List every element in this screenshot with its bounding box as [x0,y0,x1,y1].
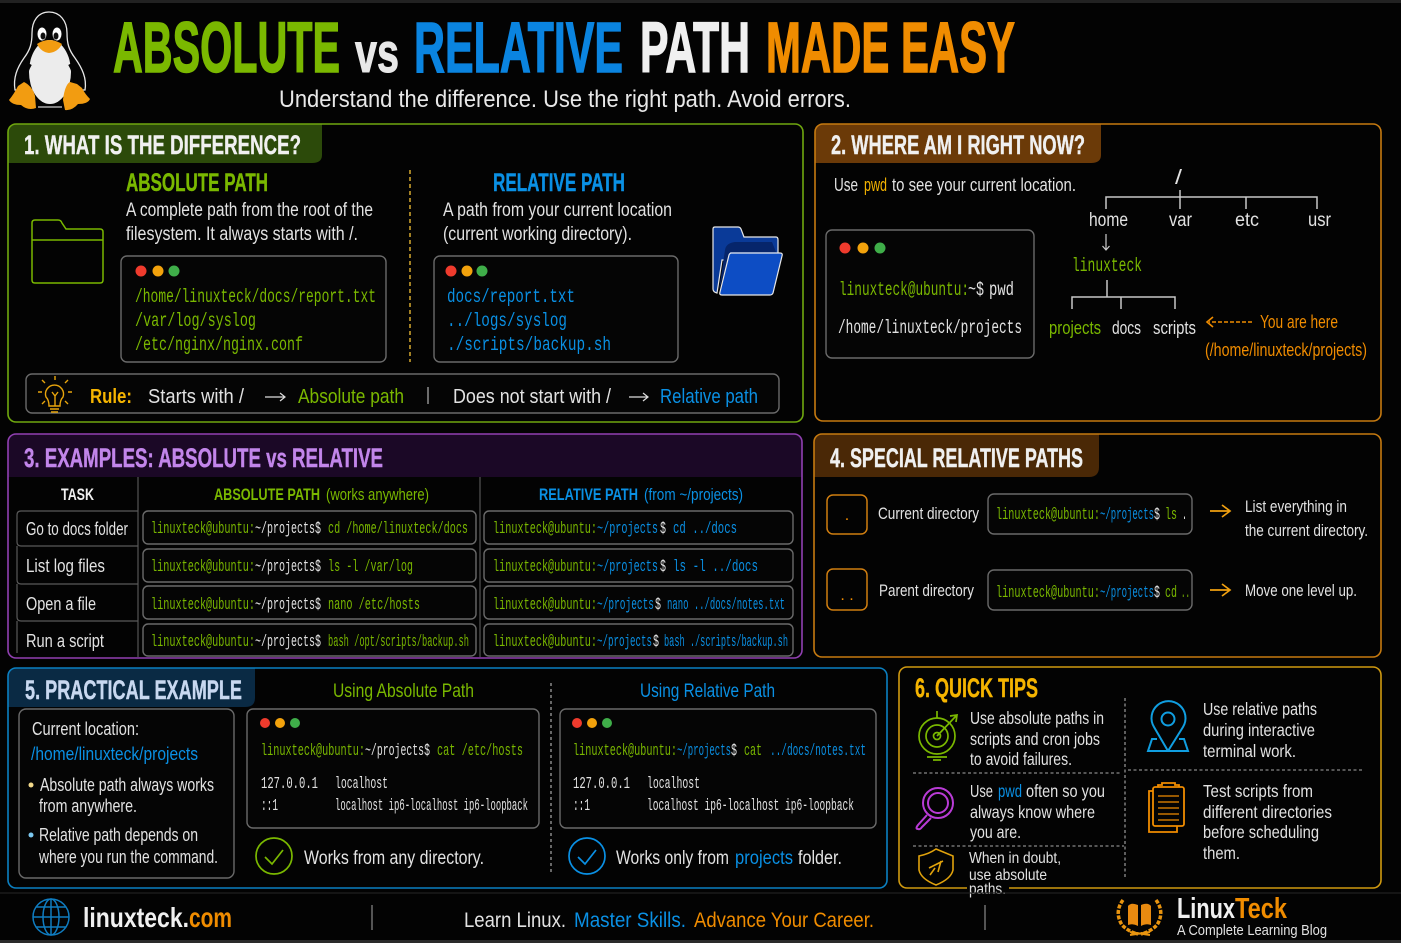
relative commands column: $ [660,557,666,576]
terminal: pwd: /home/linuxteck/projects [838,317,1022,339]
relative commands column: bash ./scripts/backup.sh [664,632,788,651]
directory tree: etc [1235,210,1259,231]
relative commands column: nano ../docs/notes.txt [667,595,785,614]
title: MADE EASY [766,9,1015,88]
directory tree: scripts [1153,318,1196,338]
terminal: absolute cat: 127.0.0.1 [261,774,318,793]
relative commands column: ~/projects [597,595,654,614]
terminal: relative cat: ::1 [573,796,590,815]
absolute commands column: ~/projects$ [255,595,321,614]
icon: shield [919,849,953,885]
terminal: pwd: ~$ [968,279,984,301]
row: parent directory: $ [1154,583,1160,602]
current location box: from anywhere. [39,796,137,816]
relative commands column: linuxteck@ubuntu: [493,519,597,538]
absolute path description: filesystem. It always starts with /. [126,224,358,245]
rule bar [26,374,779,413]
footer [0,893,1401,939]
check: works only from projects folder [569,838,842,874]
terminal: absolute cat: localhost ip6-localhost ip6-loopback [335,796,528,815]
tip: use pwd often: you are. [970,822,1021,842]
directory tree [1049,167,1332,338]
absolute commands column: cd /home/linuxteck/docs [328,519,468,538]
terminal: pwd: pwd [989,279,1014,301]
relative commands column: $ [655,595,661,614]
rule bar: Starts with / [148,386,244,408]
column headers: (works anywhere) [326,485,429,504]
panel: 2. where am I right now [815,124,1381,421]
panel: 5. practical example [8,668,887,888]
row: parent directory: cd [1165,583,1177,602]
relative commands column: linuxteck@ubuntu: [493,632,597,651]
terminal: relative examples [434,256,678,362]
row: current directory: List everything in [1245,497,1347,516]
tip: test scripts: them. [1203,843,1240,863]
row: parent directory: linuxteck@ubuntu: [996,583,1100,602]
tip: absolute paths in scripts [919,708,1104,769]
row: parent directory: .. [1181,583,1190,602]
current location box [19,709,234,878]
relative path description [443,200,672,245]
directory tree: projects [1049,318,1101,338]
tip: test scripts [1149,781,1332,863]
relative path description: (current working directory). [443,224,632,245]
row: current directory: ls [1165,505,1177,524]
tip: absolute paths in scripts: Use absolute paths in [970,708,1104,728]
panel 1 heading: 1. WHAT IS THE DIFFERENCE? [24,130,301,160]
icon: globe [33,899,69,935]
absolute commands column: linuxteck@ubuntu: [151,519,255,538]
terminal: relative examples: docs/report.txt [447,286,575,308]
brand name [1177,893,1327,939]
heading: using relative path: Using Relative Path [640,681,775,702]
icon: target [919,711,957,760]
current location box: Relative path depends on [39,825,198,845]
relative commands column: ~/projects [597,557,658,576]
tip: use pwd often: always know where [970,802,1095,822]
absolute commands column: nano /etc/hosts [328,595,420,614]
title: vs [355,21,399,84]
row: current directory: $ [1154,505,1160,524]
pwd sentence: to see your current location. [892,175,1076,195]
title: ABSOLUTE [113,9,340,88]
terminal: absolute examples: /etc/nginx/nginx.conf [135,334,303,356]
row: current directory: linuxteck@ubuntu: [996,505,1100,524]
terminal: relative cat: localhost [647,774,700,793]
relative commands column: linuxteck@ubuntu: [493,557,597,576]
panel: 6. quick tips [899,667,1381,898]
tagline: Learn Linux. [464,909,566,932]
arrow: does not start with [629,393,648,401]
tip: test scripts: Test scripts from [1203,781,1313,801]
tagline [464,909,874,932]
directory tree: linuxteck [1072,255,1142,277]
relative commands column: linuxteck@ubuntu: [493,595,597,614]
absolute path heading: ABSOLUTE PATH [126,169,268,197]
relative commands column [484,511,793,656]
absolute commands column: bash /opt/scripts/backup.sh [328,632,469,651]
terminal: relative cat: ~/projects [677,741,731,760]
brand name: A Complete Learning Blog [1177,922,1327,939]
icon: magnifier [916,788,953,829]
terminal: absolute cat: ::1 [261,796,278,815]
directory tree: docs [1112,318,1141,338]
row: current directory: . [1182,505,1187,524]
column headers: (from ~/projects) [644,485,743,504]
tip: test scripts: different directories [1203,802,1332,822]
title [113,9,1015,88]
task column: List log files [26,556,105,576]
absolute commands column: ~/projects$ [255,632,321,651]
terminal: absolute cat: ~/projects$ [365,741,430,760]
terminal: absolute cat: localhost [335,774,388,793]
column headers: RELATIVE PATH [539,485,638,504]
brand name: Teck [1235,893,1288,925]
terminal: pwd: linuxteck@ubuntu: [839,279,969,301]
current location box: where you run the command. [38,847,218,867]
terminal: absolute examples: /var/log/syslog [135,310,256,332]
row: parent directory: Parent directory [879,581,974,600]
panel 4 tab background [814,434,1099,477]
row: parent directory: . . [840,587,854,604]
pwd sentence [834,175,1076,195]
row: parent directory [827,569,1357,610]
rule bar: Absolute path [298,386,404,408]
relative commands column: $ [653,632,659,651]
relative commands column: ls -l ../docs [673,557,758,576]
terminal: absolute cat: cat /etc/hosts [437,741,523,760]
icon: outline folder [32,220,103,283]
task column [17,511,138,653]
directory tree: var [1169,210,1193,231]
tagline: Advance Your Career. [694,909,874,932]
panel 1 tab background [8,124,322,163]
terminal: absolute examples [121,256,386,362]
column headers: ABSOLUTE PATH [214,485,320,504]
arrow: starts with [265,393,285,401]
row: current directory: . [845,507,849,524]
tip: when in doubt [919,849,1061,898]
heading: using absolute path: Using Absolute Path [333,681,474,702]
panel: 3. examples [8,434,802,658]
panel: 1. what is the difference [8,124,803,422]
panel: 4. special relative paths [814,434,1381,657]
terminal: relative cat: 127.0.0.1 [573,774,630,793]
brand name: Linux [1177,893,1235,925]
subtitle: Understand the difference. Use the right path. Avoid errors. [279,86,851,113]
icon: light bulb [38,376,72,412]
absolute commands column: ~/projects$ [255,519,321,538]
website: linuxteck. [83,902,189,933]
row: current directory: Current directory [878,504,979,523]
row: parent directory: Move one level up. [1245,581,1357,600]
pwd sentence: pwd [864,175,887,195]
panel 2 tab background [815,124,1101,163]
terminal: absolute cat [247,709,539,828]
absolute commands column: ls -l /var/log [328,557,413,576]
column headers: TASK [61,485,95,504]
panel 3 header band [8,434,802,477]
icon: Linux penguin [9,12,90,110]
current location box: /home/linuxteck/projects [31,744,198,764]
tip: use relative paths: Use relative paths [1203,699,1317,719]
task column: Go to docs folder [26,519,128,539]
tip: use relative paths [1148,699,1317,761]
terminal: relative cat: localhost ip6-localhost ip6-loopback [647,796,854,815]
check: works only from projects folder: folder. [798,848,842,869]
terminal: relative cat: ../docs/notes.txt [770,741,866,760]
task column: Open a file [26,594,96,614]
tip: when in doubt: use absolute [969,867,1047,884]
tip: use relative paths: during interactive [1203,720,1315,740]
you are here callout: You are here [1260,312,1338,332]
tip: use pwd often: Use [970,781,993,801]
rule bar: Rule: [90,386,132,408]
relative commands column: ~/projects [597,519,658,538]
terminal: absolute cat: linuxteck@ubuntu: [261,741,365,760]
panel 5 heading: 5. PRACTICAL EXAMPLE [25,675,242,705]
directory tree: / [1175,167,1183,189]
row: current directory: the current directory. [1245,521,1368,540]
absolute commands column: ~/projects$ [255,557,321,576]
absolute path description [126,200,373,245]
panel 6 heading: 6. QUICK TIPS [915,673,1038,703]
absolute commands column: linuxteck@ubuntu: [151,632,255,651]
tip: use relative paths: terminal work. [1203,741,1296,761]
logo: book with laurel [1118,900,1161,935]
row: current directory [827,494,1368,540]
absolute commands column: linuxteck@ubuntu: [151,557,255,576]
terminal: relative cat: $ [731,741,737,760]
terminal: relative cat: linuxteck@ubuntu: [573,741,677,760]
tip: use pwd often [916,781,1105,842]
tip: use pwd often: often so you [1026,781,1105,801]
absolute commands column [143,511,476,656]
website: com [189,902,232,933]
tip: test scripts: before scheduling [1203,822,1319,842]
icon: blue open folder [713,227,782,295]
check: works only from projects folder: projects [735,848,793,869]
terminal: absolute examples: /home/linuxteck/docs/report.txt [135,286,376,308]
column headers [61,485,743,504]
tip: absolute paths in scripts: scripts and cron jobs [970,729,1100,749]
tip: absolute paths in scripts: to avoid failures. [970,749,1072,769]
absolute path description: A complete path from the root of the [126,200,373,221]
relative commands column: ~/projects [597,632,652,651]
tip: when in doubt: When in doubt, [969,850,1061,867]
current location box: Absolute path always works [40,775,214,795]
icon: location pin [1148,701,1188,751]
panel 2 heading: 2. WHERE AM I RIGHT NOW? [831,130,1085,160]
pwd sentence: Use [834,175,858,195]
panel 4 heading: 4. SPECIAL RELATIVE PATHS [830,443,1083,473]
terminal: pwd [826,230,1034,358]
title: PATH [640,9,750,88]
terminal: relative cat: cat [744,741,762,760]
relative commands column: $ [660,519,666,538]
relative path description: A path from your current location [443,200,672,221]
tip: when in doubt: paths. [969,881,1006,898]
check: works from any directory: Works from any directory. [304,848,484,869]
relative path heading: RELATIVE PATH [493,169,625,197]
icon: clipboard [1149,783,1184,832]
current location box: Current location: [32,719,139,739]
task column: Run a script [26,631,104,651]
panel 3 heading: 3. EXAMPLES: ABSOLUTE vs RELATIVE [24,443,383,473]
rule bar: Relative path [660,386,758,408]
you are here callout [1205,312,1367,360]
title: RELATIVE [414,9,623,88]
terminal: relative examples: ../logs/syslog [447,310,567,332]
check: works only from projects folder: Works only from [616,848,729,869]
absolute commands column: linuxteck@ubuntu: [151,595,255,614]
row: current directory: ~/projects [1100,505,1154,524]
terminal: relative cat [560,709,876,828]
panel 5 tab background [8,668,255,707]
check: works from any directory [256,838,484,874]
relative commands column: cd ../docs [673,519,737,538]
tagline: Master Skills. [574,909,686,932]
rule bar: Does not start with / [453,386,611,408]
terminal: relative examples: ./scripts/backup.sh [447,334,611,356]
directory tree: home [1089,210,1128,231]
directory tree: usr [1308,210,1332,231]
row: parent directory: ~/projects [1100,583,1154,602]
tip: use pwd often: pwd [998,781,1022,801]
